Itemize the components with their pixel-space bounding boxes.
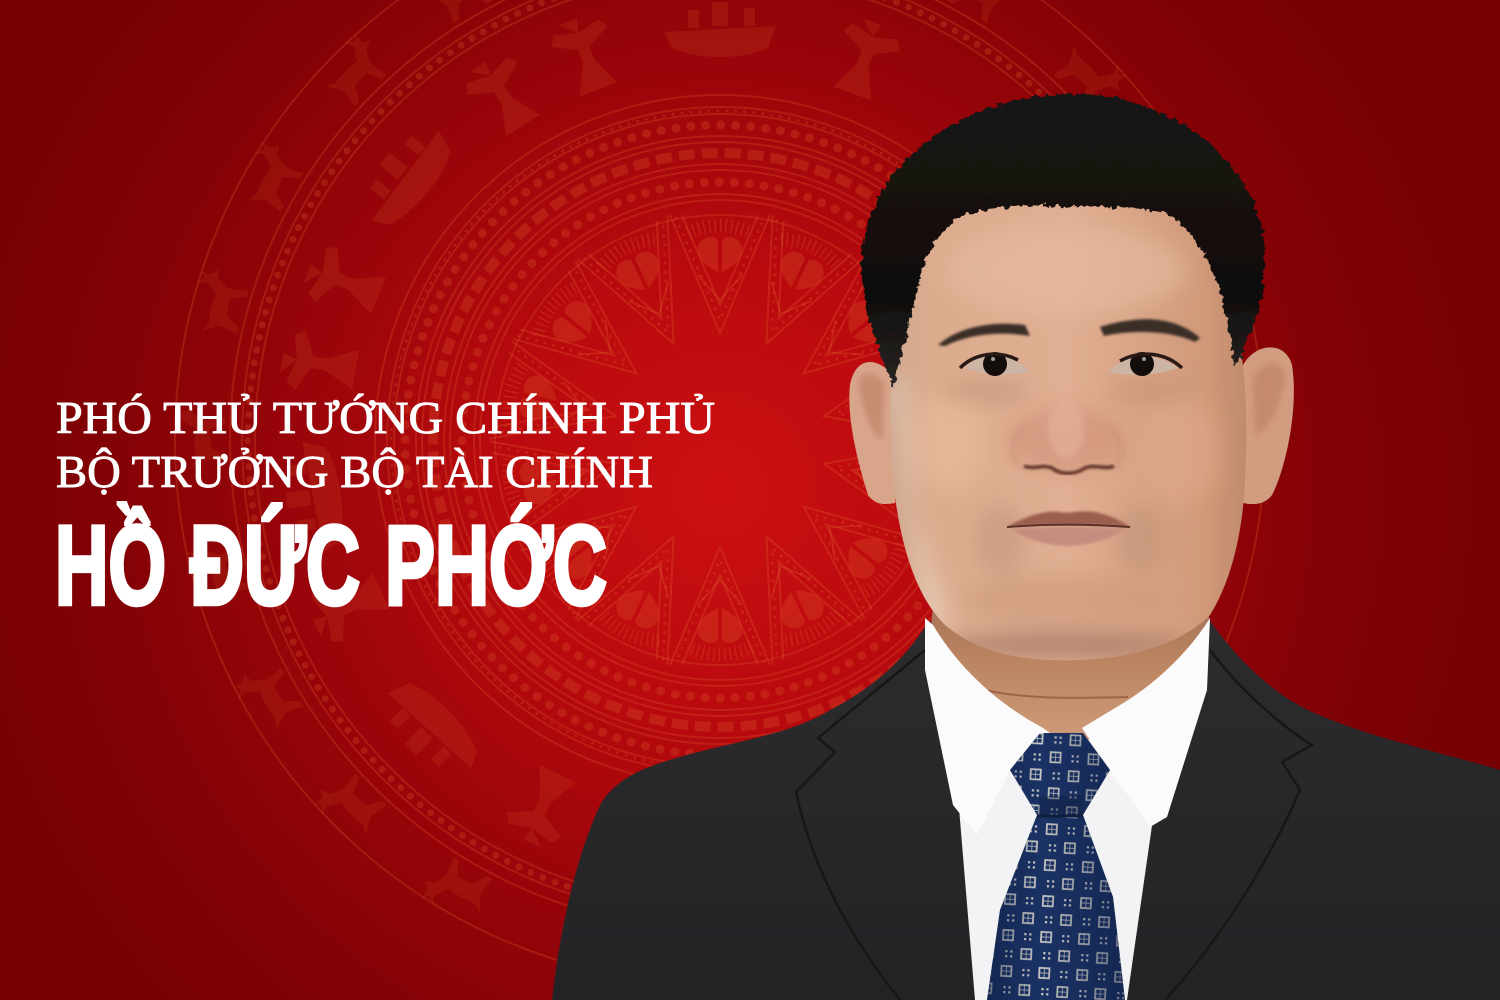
name: PHỚC [385, 503, 607, 628]
left eyebrow [938, 324, 1030, 346]
title block [55, 392, 715, 628]
left eye [960, 352, 1030, 376]
drum concentric rings [175, 0, 1265, 985]
nose [1008, 402, 1124, 473]
neck crease [985, 690, 1128, 698]
drum motifs: boats and figures [278, 2, 1158, 878]
name [55, 503, 607, 628]
face shading [893, 225, 1220, 658]
title line 2: BỘ TRƯỞNG BỘ TÀI CHÍNH [56, 446, 653, 497]
right ear [1243, 347, 1294, 504]
right eye [1108, 352, 1182, 376]
lapels [796, 650, 1312, 1000]
title line 1: PHÓ THỦ TƯỚNG CHÍNH PHỦ [56, 392, 715, 443]
suit jacket [552, 618, 1500, 1000]
face [890, 190, 1246, 660]
necktie [987, 733, 1125, 1000]
drum motifs: deer ring [173, 0, 1267, 928]
portrait [552, 94, 1500, 1000]
drum star: fourteen triangles [490, 215, 950, 665]
right eyebrow [1100, 319, 1200, 342]
ear shading [858, 364, 1285, 440]
shirt [950, 700, 1170, 1000]
hair [861, 94, 1264, 388]
name: ĐỨC [190, 503, 360, 628]
shirt collar [925, 618, 1210, 835]
name: HỒ [55, 503, 166, 628]
bronze drum pattern [173, 0, 1267, 985]
mouth [1007, 511, 1130, 546]
left ear [849, 362, 895, 504]
neck [930, 580, 1210, 745]
